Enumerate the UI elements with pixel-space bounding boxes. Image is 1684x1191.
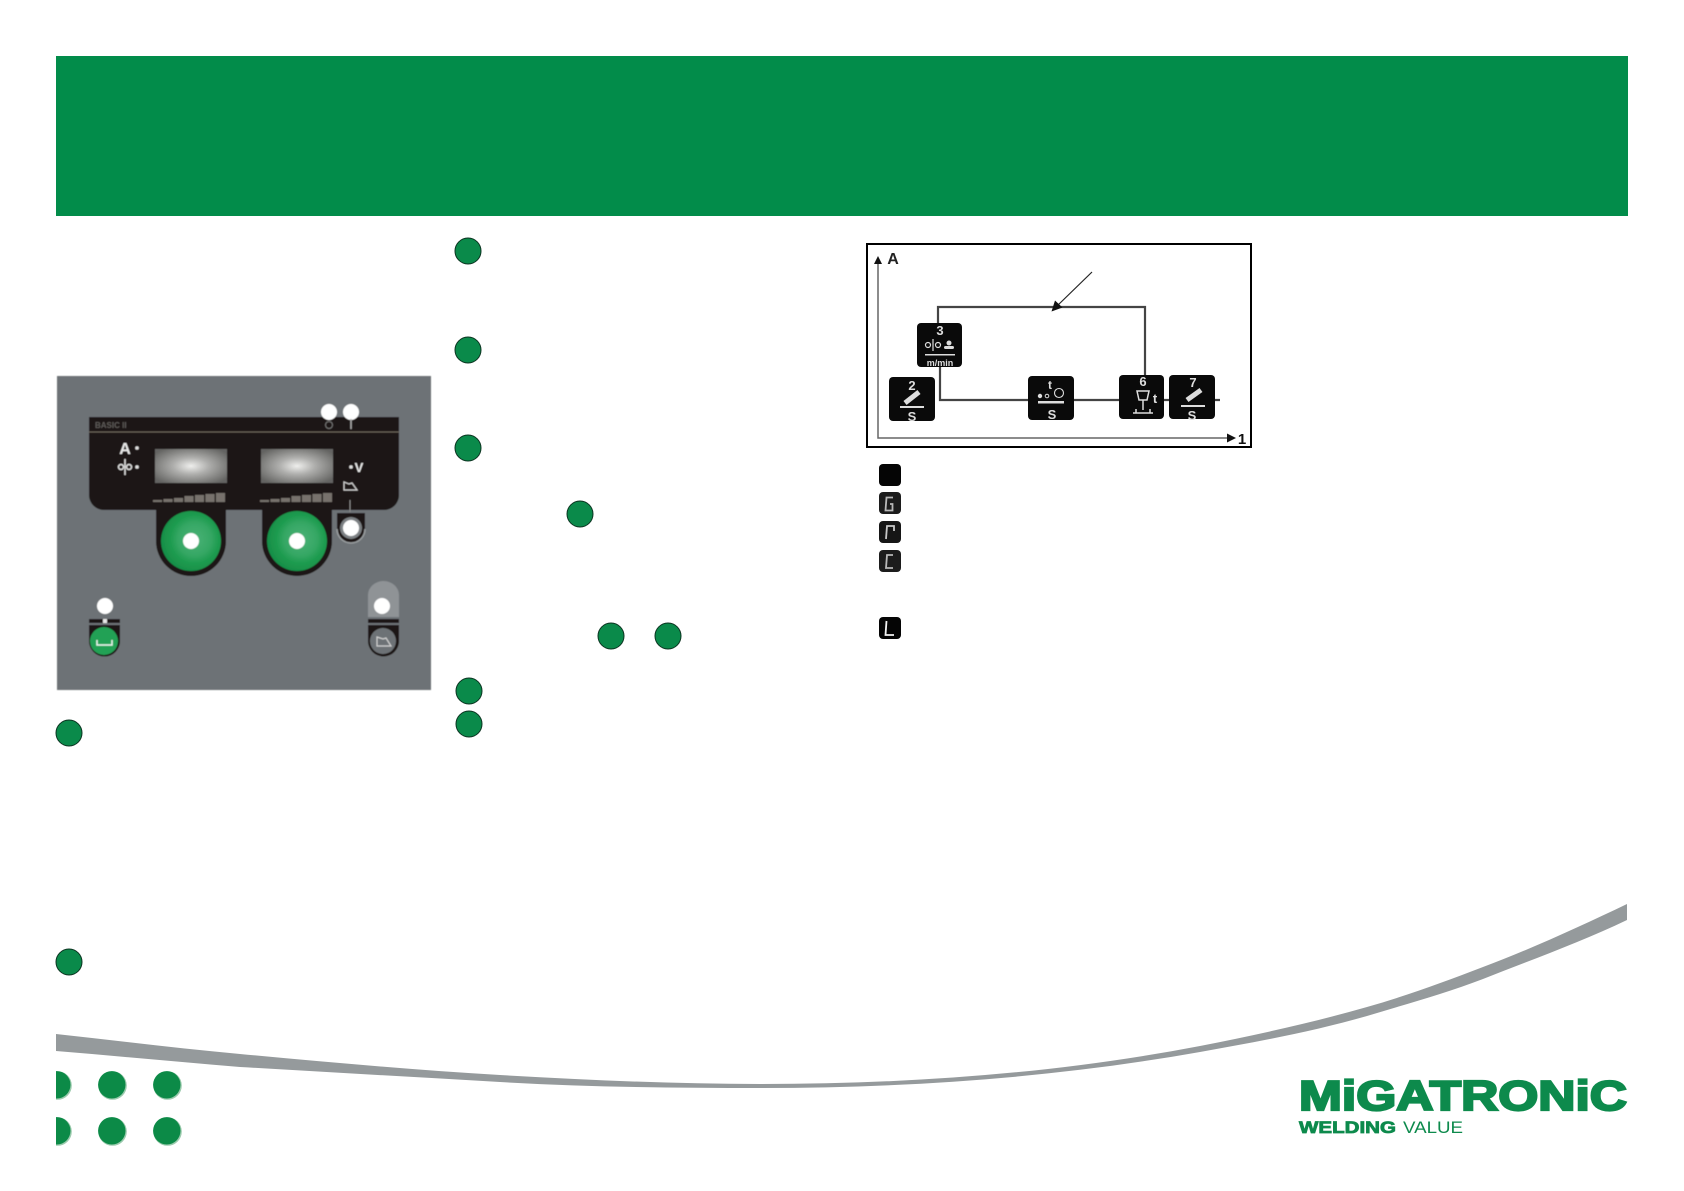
right knob <box>262 505 332 576</box>
numbered marker <box>598 623 624 649</box>
wire icon <box>118 446 139 475</box>
footer swoosh <box>56 904 1627 1088</box>
logo tagline bold: WELDING <box>1299 1118 1396 1137</box>
logo tagline light: VALUE <box>1403 1118 1463 1137</box>
crater icon <box>344 482 357 490</box>
numbered marker <box>455 238 481 264</box>
display strip <box>89 417 399 510</box>
box 7: S <box>1188 408 1197 423</box>
pointer arrow <box>1052 272 1092 312</box>
control panel illustration <box>57 376 431 690</box>
box 2 <box>889 377 935 424</box>
left level bars <box>153 493 225 502</box>
box 6: 6 <box>1139 374 1147 389</box>
process line <box>938 307 1220 400</box>
header band <box>56 56 1628 216</box>
numbered marker <box>655 623 681 649</box>
axes: A <box>887 251 899 268</box>
display strip: BASIC II <box>95 421 127 430</box>
label A: A <box>119 441 131 458</box>
box 6: t <box>1153 391 1158 406</box>
numbered marker <box>567 501 593 527</box>
logo <box>1299 1072 1627 1137</box>
legend icon: r <box>879 521 901 543</box>
welding sequence diagram <box>867 244 1251 448</box>
left button <box>89 598 120 656</box>
box 3: 3 <box>936 323 944 338</box>
legend icon: G <box>879 492 901 514</box>
box t: t <box>1048 378 1052 392</box>
box 3: m/min <box>927 358 953 368</box>
logo wordmark: MiGATRONiC <box>1299 1072 1627 1119</box>
top marker dots <box>321 404 359 429</box>
axes <box>874 251 1246 448</box>
label V <box>349 460 364 475</box>
legend icon: L <box>879 617 901 639</box>
numbered marker <box>56 720 82 746</box>
box 7 <box>1169 375 1215 423</box>
axes: 1 <box>1238 431 1246 448</box>
box 7: 7 <box>1189 375 1197 390</box>
legend icon: blank <box>879 464 901 486</box>
right level bars <box>260 493 332 502</box>
box t <box>1028 376 1074 422</box>
left screen <box>155 449 227 483</box>
box 3 <box>917 323 962 368</box>
numbered marker <box>456 678 482 704</box>
label V: V <box>355 460 364 475</box>
diagram frame <box>867 244 1251 447</box>
numbered marker <box>456 711 482 737</box>
right button <box>368 581 399 656</box>
numbered marker <box>56 949 82 975</box>
numbered marker <box>455 337 481 363</box>
decorative dot grid <box>43 1071 182 1146</box>
box t: S <box>1048 407 1057 422</box>
box 2: S <box>908 409 917 424</box>
numbered marker <box>455 435 481 461</box>
box 2: 2 <box>908 378 916 393</box>
box 6 <box>1119 374 1164 419</box>
panel background <box>57 376 431 690</box>
left knob <box>156 505 226 576</box>
legend icon: C <box>879 550 901 572</box>
small button <box>337 513 365 543</box>
right screen <box>261 449 333 483</box>
